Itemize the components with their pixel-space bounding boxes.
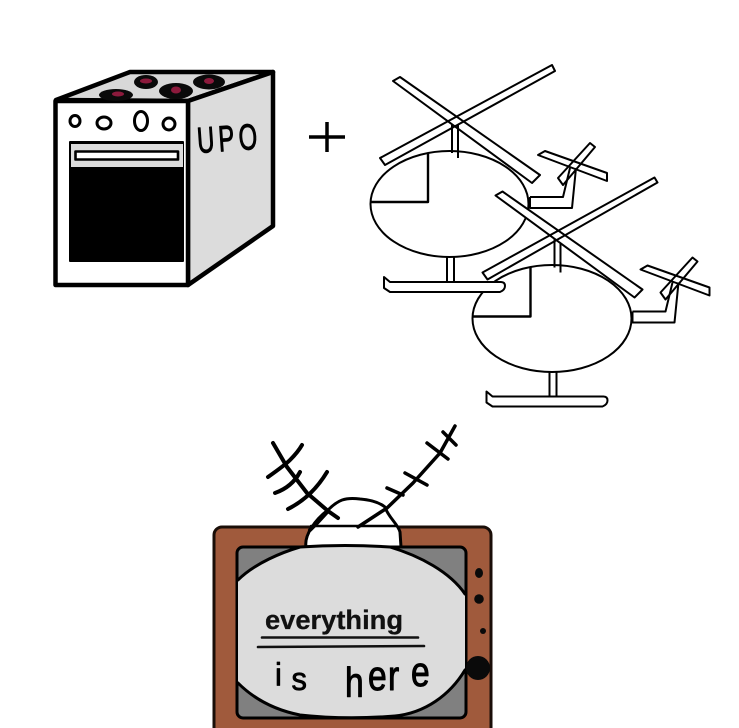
rotor mast xyxy=(452,125,458,158)
tail rotor xyxy=(538,143,607,185)
helicopter body xyxy=(472,265,632,372)
icon: rear helicopter xyxy=(370,65,607,282)
oven door xyxy=(69,141,184,262)
oven front panel xyxy=(56,101,188,285)
screen glass xyxy=(238,546,465,718)
cockpit line xyxy=(474,268,530,316)
cabinet edge across base xyxy=(311,525,397,527)
burners xyxy=(99,74,225,101)
oven side panel xyxy=(188,72,273,285)
antenna base xyxy=(306,498,401,547)
tail boom xyxy=(530,168,576,208)
oven knobs xyxy=(70,112,175,130)
main rotor xyxy=(482,178,658,298)
helicopter body xyxy=(370,151,528,257)
icon: front helicopter xyxy=(472,178,710,406)
icon: television xyxy=(214,426,491,728)
tv cabinet xyxy=(214,527,491,728)
cockpit line xyxy=(371,153,428,202)
right antenna xyxy=(358,426,456,527)
screen handwriting: here xyxy=(345,650,430,707)
landing strut xyxy=(447,257,454,282)
left antenna xyxy=(268,443,338,530)
landing strut xyxy=(550,372,556,396)
rotor mast xyxy=(554,240,560,272)
tail rotor xyxy=(640,258,710,300)
oven side label: UPO xyxy=(196,116,259,161)
landing skid xyxy=(486,392,608,406)
main rotor xyxy=(380,65,555,183)
tail boom xyxy=(632,282,678,322)
rear helicopter landing skid xyxy=(384,277,505,292)
icon: oven xyxy=(56,72,273,285)
screen handwriting xyxy=(275,650,430,707)
plus sign xyxy=(309,122,345,152)
tv buttons xyxy=(466,568,490,680)
screen bezel xyxy=(237,547,466,718)
oven top xyxy=(56,72,273,101)
screen heading: everything xyxy=(265,605,403,635)
screen handwriting: is xyxy=(275,656,307,697)
screen rules xyxy=(258,638,424,647)
